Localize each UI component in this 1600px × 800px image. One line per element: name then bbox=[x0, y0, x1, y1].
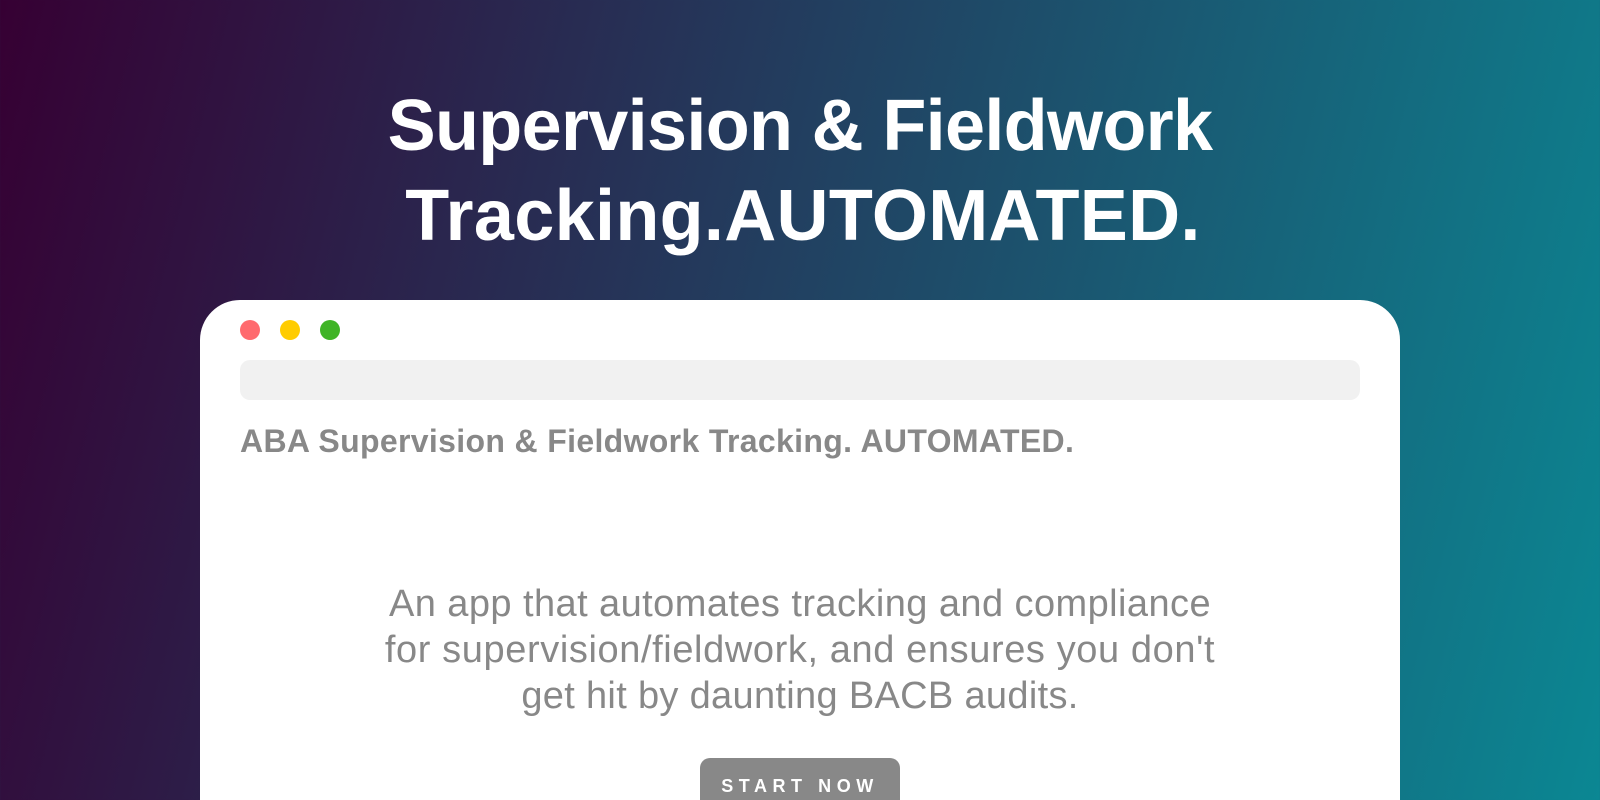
button: start now: START NOW bbox=[721, 776, 879, 796]
page heading: ABA Supervision & Fieldwork Tracking. AUTOMATED. bbox=[240, 423, 1074, 459]
panel: browser window bbox=[200, 300, 1400, 800]
icon: red window dot bbox=[240, 320, 260, 340]
title bbox=[388, 86, 1214, 256]
address bar bbox=[240, 360, 1360, 400]
description text: for supervision/fieldwork, and ensures you don't bbox=[385, 629, 1215, 671]
icon: yellow window dot bbox=[280, 320, 300, 340]
description text bbox=[385, 583, 1215, 717]
button: start now bbox=[700, 758, 900, 800]
description text: An app that automates tracking and compliance bbox=[389, 583, 1211, 625]
icon: green window dot bbox=[320, 320, 340, 340]
description text: get hit by daunting BACB audits. bbox=[521, 675, 1079, 717]
title: Tracking.AUTOMATED. bbox=[405, 176, 1201, 256]
title: Supervision & Fieldwork bbox=[388, 86, 1212, 166]
